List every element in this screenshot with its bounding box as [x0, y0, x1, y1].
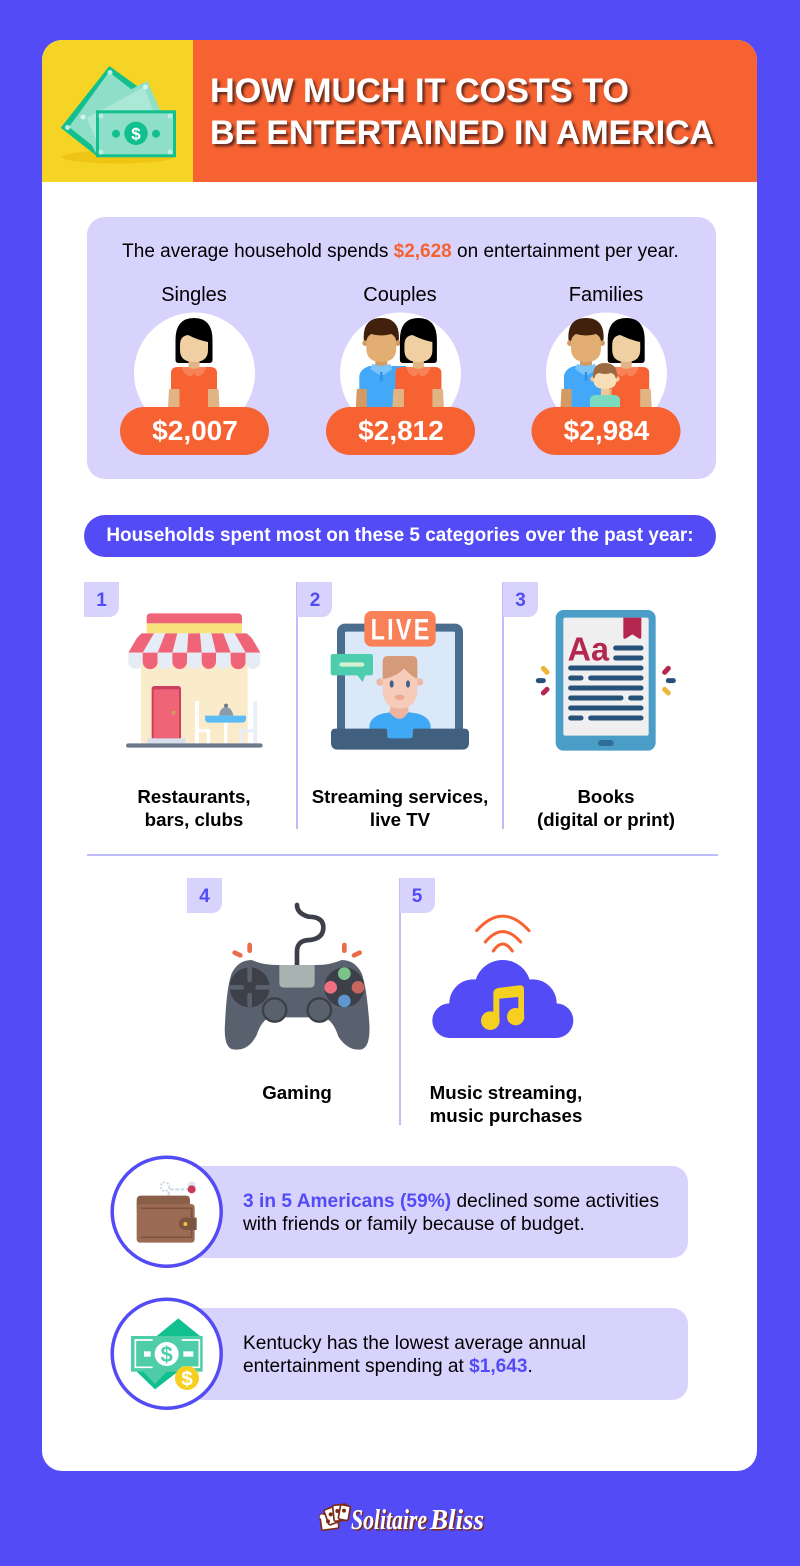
- header banner: [42, 40, 757, 182]
- label: restaurants: bars, clubs: [145, 809, 243, 830]
- average spending sentence: The average household spends $2,628 on entertainment per year.: [122, 241, 679, 262]
- logo: Solitaire Bliss: Solitaire: [351, 1504, 427, 1536]
- group: singles: Singles: [161, 284, 227, 306]
- icon: laptop live stream: LIVE: [371, 613, 429, 646]
- icon: e-reader: Aa: [568, 632, 609, 669]
- logo: Solitaire Bliss: [320, 1504, 484, 1536]
- label: streaming: live TV: [370, 809, 431, 830]
- callout: lowest spending: [112, 1299, 688, 1408]
- label: books: Books: [577, 786, 635, 807]
- label: gaming: Gaming: [262, 1082, 332, 1103]
- category 2: streaming: 2: [310, 590, 320, 611]
- icon: money and coin: $: [181, 1368, 193, 1391]
- label: music: music purchases: [430, 1105, 582, 1126]
- categories heading pill: [84, 515, 716, 557]
- callout: declined activities: [112, 1157, 688, 1266]
- label: restaurants: [137, 786, 251, 830]
- icon: laptop live stream: [331, 611, 469, 750]
- category 2: streaming: [297, 582, 488, 830]
- title: [210, 72, 714, 152]
- label: streaming: [312, 786, 488, 830]
- label: music: [430, 1082, 582, 1126]
- callout text: 3 in 5 Americans (59%) declined some activities: [243, 1191, 659, 1212]
- label: streaming: Streaming services,: [312, 786, 488, 807]
- title: HOW MUCH IT COSTS TO: [210, 72, 629, 110]
- icon: e-reader: [538, 610, 673, 751]
- label: restaurants: Restaurants,: [137, 786, 251, 807]
- title: BE ENTERTAINED IN AMERICA: [210, 114, 714, 152]
- label: music: Music streaming,: [430, 1082, 582, 1103]
- icon: banknotes: [61, 66, 175, 164]
- category 4: gaming: 4: [199, 886, 210, 907]
- callout text: entertainment spending at $1,643.: [243, 1356, 533, 1377]
- icon: money and coin: $: [161, 1342, 173, 1367]
- icon: game controller: [225, 905, 370, 1050]
- group: couples: Couples: [363, 284, 437, 306]
- label: books: (digital or print): [537, 809, 675, 830]
- category 1: restaurants: 1: [96, 590, 107, 611]
- category 3: books: 3: [515, 590, 526, 611]
- categories heading pill: Households spent most on these 5 categories over the past year:: [106, 525, 694, 546]
- category 3: books: [503, 582, 675, 830]
- group: singles: $2,007: [152, 415, 238, 446]
- category 4: gaming: [187, 878, 370, 1103]
- callout text: with friends or family because of budget.: [242, 1214, 585, 1235]
- label: books: [537, 786, 675, 830]
- icon: money and coin: [131, 1318, 203, 1391]
- group: singles: [120, 284, 269, 455]
- logo: Solitaire Bliss: Bliss: [429, 1504, 484, 1536]
- icon: wallet: [137, 1181, 197, 1243]
- icon: music cloud: [432, 916, 573, 1038]
- callout text: [242, 1191, 659, 1235]
- icon: restaurant storefront: [126, 613, 263, 748]
- category 1: restaurants: [84, 582, 263, 830]
- callout text: [243, 1333, 586, 1377]
- group: families: Families: [569, 284, 643, 306]
- panel: household spending: [87, 217, 716, 479]
- group: couples: [326, 284, 475, 455]
- group: couples: $2,812: [358, 415, 444, 446]
- category 5: music: 5: [412, 886, 423, 907]
- callout text: Kentucky has the lowest average annual: [243, 1333, 586, 1354]
- group: families: $2,984: [564, 415, 650, 446]
- category 5: music: [400, 878, 582, 1126]
- group: families: [532, 284, 680, 455]
- icon: banknotes: $: [131, 124, 141, 144]
